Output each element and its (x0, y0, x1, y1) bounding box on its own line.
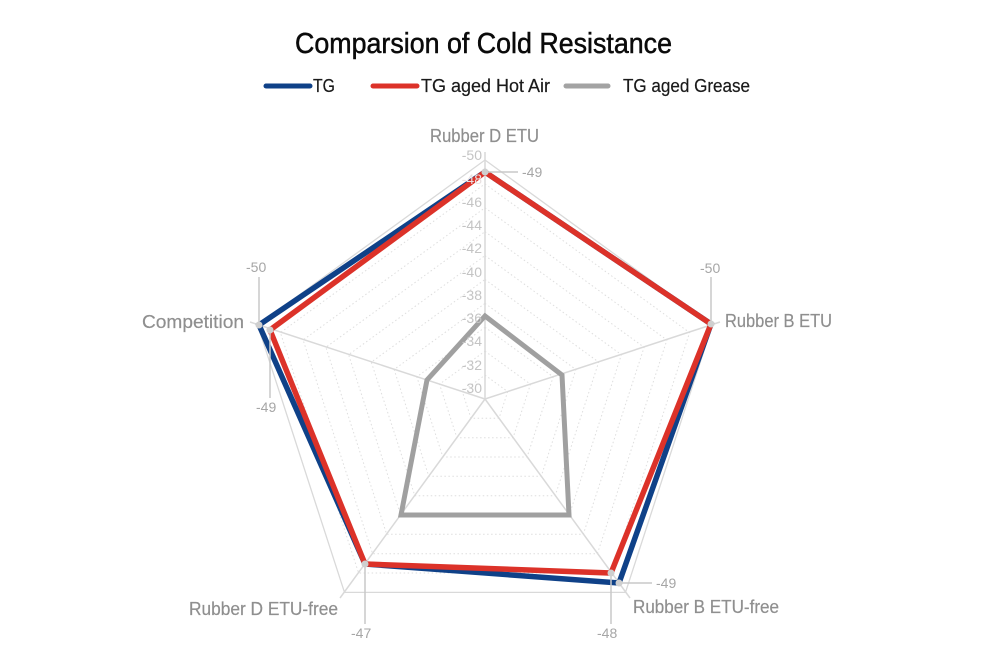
data value labels (246, 164, 720, 641)
data value labels: -50 (246, 259, 266, 275)
data value labels: -49 (522, 164, 542, 180)
axis labels: Competition (142, 312, 244, 332)
scale labels: -48 (462, 171, 482, 187)
data value labels: -50 (700, 260, 720, 276)
radar grid (250, 152, 720, 598)
data value labels: -47 (351, 625, 371, 641)
scale labels: -46 (462, 194, 482, 210)
axis labels: Rubber D ETU (430, 126, 539, 146)
legend item: TG aged Grease: TG aged Grease (623, 76, 750, 96)
scale labels: -42 (462, 240, 482, 256)
scale labels: -30 (462, 380, 482, 396)
data label leaders and markers (256, 168, 714, 624)
scale labels: -50 (462, 147, 482, 163)
legend item: TG (266, 76, 335, 96)
scale labels: -36 (462, 310, 482, 326)
data value labels: -49 (656, 575, 676, 591)
scale labels: -44 (462, 217, 482, 233)
scale labels: -32 (462, 357, 482, 373)
scale labels: -38 (462, 287, 482, 303)
axis labels: Rubber D ETU-free (189, 599, 338, 619)
axis labels (142, 126, 832, 619)
series: TG aged Hot Air (270, 172, 711, 573)
axis labels: Rubber B ETU-free (633, 597, 779, 617)
legend (266, 76, 750, 96)
legend item: TG: TG (313, 76, 335, 96)
axis labels: Rubber B ETU (725, 311, 832, 331)
scale labels: -40 (462, 264, 482, 280)
title: Comparsion of Cold Resistance (295, 28, 672, 60)
legend item: TG aged Hot Air: TG aged Hot Air (421, 76, 550, 96)
series: TG (259, 172, 711, 583)
data value labels: -49 (256, 399, 276, 415)
scale labels (462, 147, 482, 396)
series: TG aged Grease (401, 316, 569, 515)
scale labels: -34 (462, 333, 482, 349)
data value labels: -48 (597, 625, 617, 641)
